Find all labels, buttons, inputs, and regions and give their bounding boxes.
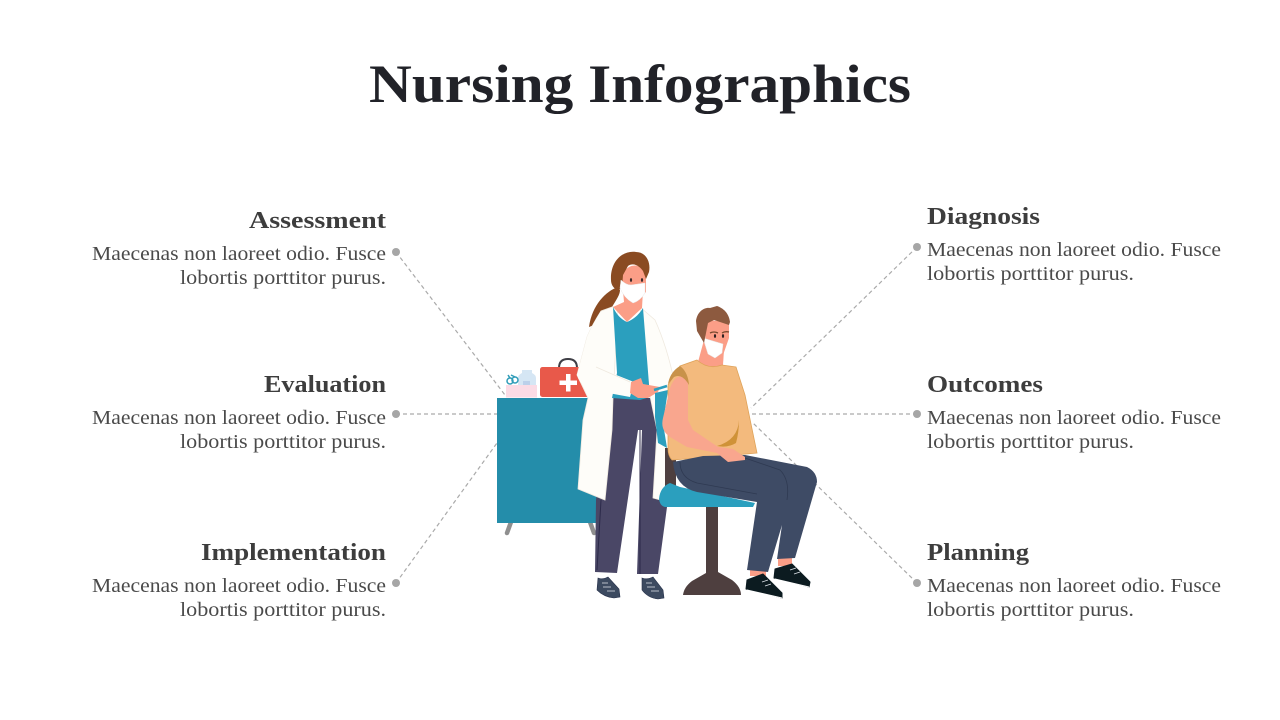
icon: first aid kit xyxy=(540,359,592,397)
illustration: nurse vaccinating patient xyxy=(497,252,817,599)
patient mask xyxy=(703,338,723,358)
figure: chair xyxy=(655,390,755,595)
text block: Assessment: Maecenas non laoreet odio. Fusce xyxy=(92,243,386,265)
text block: Evaluation: lobortis porttitor purus. xyxy=(180,431,386,453)
text block: Evaluation: Maecenas non laoreet odio. Fusce xyxy=(92,407,386,429)
nurse hair xyxy=(611,252,649,290)
shirt fold xyxy=(717,420,739,447)
nurse pants xyxy=(595,398,667,574)
title: Nursing Infographics xyxy=(369,54,911,114)
nurse sleeve xyxy=(577,311,634,397)
nurse shoes xyxy=(597,577,620,598)
nurse hand with syringe xyxy=(630,378,660,398)
nurse scrubs xyxy=(612,307,650,400)
text block: Diagnosis: Diagnosis xyxy=(927,203,1040,230)
patient face xyxy=(705,320,729,358)
text block: Assessment xyxy=(92,207,387,289)
patient ankles xyxy=(750,556,792,576)
patient arm and hand xyxy=(662,376,745,462)
patient neck xyxy=(698,340,724,368)
text block: Planning: lobortis porttitor purus. xyxy=(927,599,1134,621)
text block: Diagnosis xyxy=(927,203,1221,285)
text block: Diagnosis: Maecenas non laoreet odio. Fusce xyxy=(927,239,1221,261)
ponytail xyxy=(589,287,620,327)
nurse coat xyxy=(577,307,618,500)
text block: Evaluation xyxy=(92,371,386,453)
nurse face xyxy=(621,265,646,303)
text block: Outcomes: lobortis porttitor purus. xyxy=(927,431,1134,453)
nurse eyes xyxy=(630,278,643,282)
text block: Planning xyxy=(927,539,1221,621)
icon: medical table xyxy=(497,398,597,533)
icon: tissue box with scissors and bottle xyxy=(506,370,537,398)
text block: Implementation xyxy=(92,539,386,621)
patient shirt xyxy=(668,360,757,460)
figure: patient xyxy=(662,306,817,598)
patient shoes xyxy=(746,574,782,598)
text block: Outcomes: Maecenas non laoreet odio. Fusce xyxy=(927,407,1221,429)
text block: Assessment: Assessment xyxy=(249,207,387,234)
patient eyebrows and eyes xyxy=(710,332,729,338)
text block: Diagnosis: lobortis porttitor purus. xyxy=(927,263,1134,285)
patient hair xyxy=(696,306,730,343)
text block: Evaluation: Evaluation xyxy=(264,371,386,398)
text block: Implementation: Implementation xyxy=(201,539,386,566)
text block: Implementation: lobortis porttitor purus. xyxy=(180,599,386,621)
text block: Assessment: lobortis porttitor purus. xyxy=(180,267,386,289)
nurse mask xyxy=(620,280,645,303)
text block: Planning: Planning xyxy=(927,539,1030,566)
text block: Outcomes: Outcomes xyxy=(927,371,1043,398)
shirt sleeve xyxy=(668,366,689,385)
text block: Planning: Maecenas non laoreet odio. Fusce xyxy=(927,575,1221,597)
nurse neck xyxy=(613,290,643,322)
figure: nurse xyxy=(577,252,675,599)
patient pants xyxy=(673,455,817,572)
connector lines xyxy=(392,243,921,587)
text block: Outcomes xyxy=(927,371,1221,453)
text block: Implementation: Maecenas non laoreet odio. Fusce xyxy=(92,575,386,597)
